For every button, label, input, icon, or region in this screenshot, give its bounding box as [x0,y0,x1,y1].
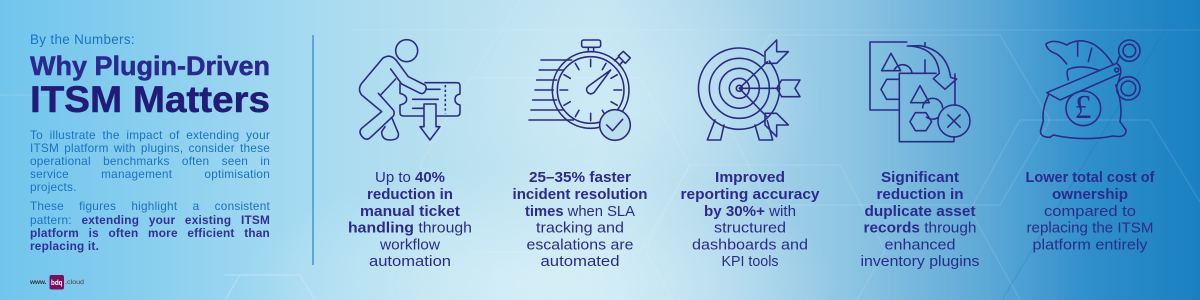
text: reporting accuracy: structured [714,220,786,236]
divider [312,35,314,265]
intro paragraph: projects. [30,180,77,194]
icon: money bag and scissors: £ [1074,89,1092,126]
text: manual ticket reduction: Up to 40% [375,169,445,186]
text: manual ticket reduction: manual ticket [360,203,460,220]
highlighted pattern paragraph [30,199,270,253]
title: ITSM Matters [30,79,270,120]
highlighted pattern paragraph: These figures highlight a consistent [30,199,270,213]
text: duplicate asset records: Significant [881,169,959,186]
text: duplicate asset records: inventory plugins [860,253,980,270]
text: manual ticket reduction: handling through [348,220,472,236]
text: duplicate asset records [860,169,980,270]
text: incident resolution: tracking and [536,220,624,236]
text: lower total cost: replacing the ITSM [1026,220,1154,236]
intro paragraph: ITSM platform with plugins, consider these [30,141,270,155]
text: reporting accuracy: KPI tools [722,253,778,270]
title: Why Plugin-Driven [30,51,270,81]
text: reporting accuracy: Improved [715,169,785,186]
bdq cloud logo: www. [29,279,47,286]
text: duplicate asset records: records through [864,220,976,236]
intro paragraph [30,128,270,194]
text: manual ticket reduction [348,169,472,270]
bdq cloud logo: .cloud [65,279,84,286]
icon: target with arrows [698,39,801,141]
text: lower total cost: ownership [1052,186,1128,203]
icon: stopwatch [528,39,632,142]
text: incident resolution: automated [540,253,620,270]
text: incident resolution: times when SLA [525,203,635,220]
text: incident resolution: 25–35% faster [529,169,631,186]
intro paragraph: To illustrate the impact of extending your [30,128,270,142]
text: reporting accuracy: by 30%+ with [704,203,796,220]
text: incident resolution: incident resolution [512,186,648,203]
highlighted pattern paragraph: replacing it. [30,239,99,253]
text: duplicate asset records: reduction in [876,186,964,203]
text: incident resolution [512,169,648,270]
icon: money bag and scissors [1040,39,1141,140]
text: lower total cost: platform entirely [1032,236,1148,254]
text: lower total cost: Lower total cost of [1026,169,1155,186]
title [30,51,270,120]
highlighted pattern paragraph: pattern: extending your existing ITSM [30,213,270,227]
subtitle: By the Numbers: [30,32,135,47]
text: duplicate asset records: enhanced [884,236,956,254]
text: manual ticket reduction: automation [369,253,451,270]
text: reporting accuracy [680,169,820,270]
highlighted pattern paragraph: platform is often more efficient than [30,226,270,240]
text: lower total cost: compared to [1044,203,1136,220]
text: incident resolution: escalations are [526,236,634,254]
text: manual ticket reduction: reduction in [367,186,453,203]
bdq cloud logo: bdq [51,280,62,287]
icon: duplicate documents [869,41,971,142]
icon: person pushing ticket [358,38,461,141]
text: reporting accuracy: reporting accuracy [680,186,820,203]
intro paragraph: operational benchmarks often seen in [30,154,270,168]
bdq cloud logo [29,275,84,290]
intro paragraph: service management optimisation [30,167,270,181]
text: manual ticket reduction: workflow [379,236,440,254]
text: duplicate asset records: duplicate asset [864,203,976,220]
text: reporting accuracy: dashboards and [692,236,808,254]
